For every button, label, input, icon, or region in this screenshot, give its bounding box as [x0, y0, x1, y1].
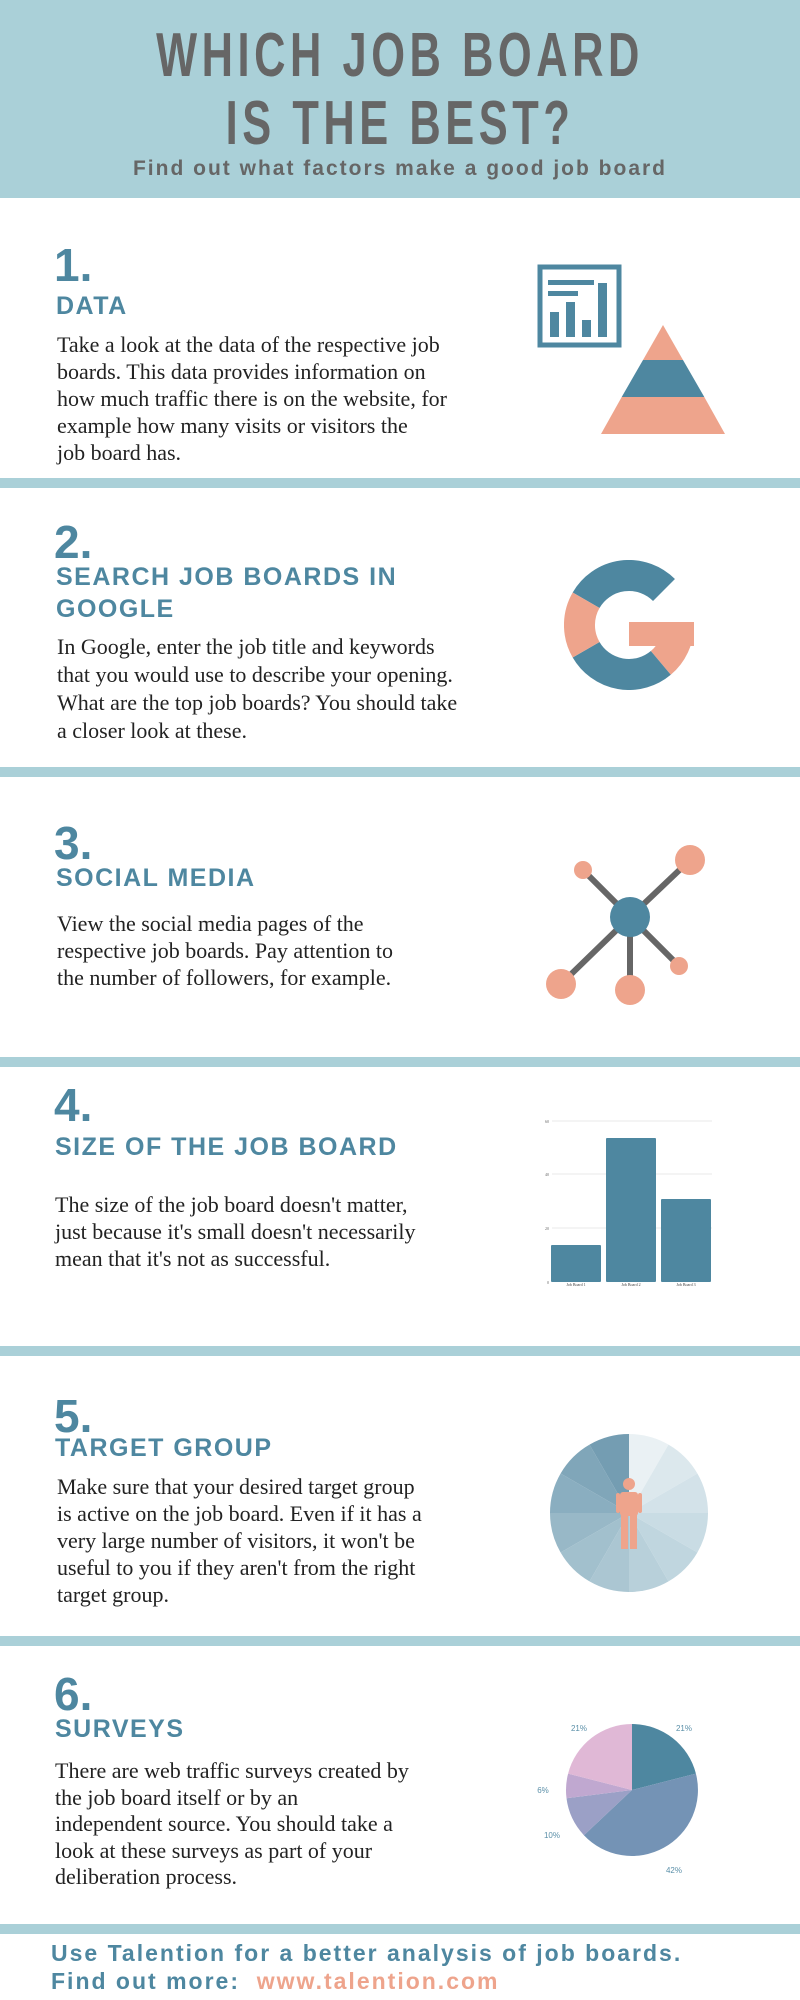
- text social: the number of followers, for example.: [57, 965, 391, 990]
- text size: just because it's small doesn't necessarily: [55, 1219, 415, 1244]
- text size: mean that it's not as successful.: [55, 1246, 330, 1271]
- heading surveys: SURVEYS: [55, 1715, 185, 1743]
- bar chart: 20: [545, 1226, 549, 1231]
- text surveys: There are web traffic surveys created by: [55, 1758, 409, 1783]
- icon: network: [546, 845, 705, 1005]
- icon: target wheel with person: [550, 1434, 708, 1592]
- pie chart: [537, 1724, 698, 1875]
- text google: that you would use to describe your opening.: [57, 662, 453, 687]
- text target: [57, 1474, 422, 1607]
- heading google: SEARCH JOB BOARDS IN: [56, 563, 397, 591]
- number 1: 1.: [54, 239, 92, 291]
- text target: target group.: [57, 1582, 169, 1607]
- text data: [56, 332, 447, 465]
- bar chart: Job Board 2: [621, 1282, 641, 1287]
- footer: [51, 1940, 682, 1994]
- subtitle: Find out what factors make a good job board: [133, 157, 667, 180]
- number 5: 5.: [54, 1390, 92, 1442]
- bar chart: [545, 1119, 712, 1287]
- text size: [54, 1192, 416, 1271]
- text surveys: deliberation process.: [55, 1864, 237, 1889]
- text google: What are the top job boards? You should take: [57, 690, 457, 715]
- heading google: GOOGLE: [56, 595, 175, 623]
- section 2: google: [54, 516, 457, 743]
- text data: Take a look at the data of the respective job: [57, 332, 440, 357]
- heading google: [56, 563, 397, 623]
- icon: chart and pyramid: [538, 264, 725, 434]
- section 3: social media: [54, 817, 393, 990]
- text surveys: independent source. You should take a: [55, 1811, 393, 1836]
- text surveys: [55, 1758, 409, 1889]
- header panel: [0, 0, 800, 198]
- text surveys: the job board itself or by an: [55, 1784, 298, 1810]
- pie chart: 21%: [676, 1724, 692, 1733]
- text google: a closer look at these.: [57, 718, 247, 743]
- footer: Use Talention for a better analysis of job boards.: [51, 1940, 682, 1966]
- text social: respective job boards. Pay attention to: [57, 938, 393, 963]
- heading social: SOCIAL MEDIA: [56, 864, 256, 892]
- bar chart: Job Board 1: [566, 1282, 586, 1287]
- section 1: data: [54, 239, 447, 465]
- heading data: DATA: [56, 292, 128, 320]
- title: IS THE BEST?: [226, 89, 574, 158]
- text size: The size of the job board doesn't matter,: [55, 1192, 408, 1217]
- pie chart: 10%: [544, 1831, 560, 1840]
- text data: boards. This data provides information on: [57, 359, 426, 384]
- section 5: target group: [54, 1390, 422, 1607]
- text data: example how many visits or visitors the: [57, 413, 408, 438]
- heading size: SIZE OF THE JOB BOARD: [55, 1133, 398, 1161]
- text surveys: look at these surveys as part of your: [55, 1838, 372, 1862]
- text data: how much traffic there is on the website, for: [57, 386, 447, 411]
- number 4: 4.: [54, 1079, 92, 1131]
- title: WHICH JOB BOARD: [156, 21, 644, 90]
- text data: job board has.: [57, 440, 181, 465]
- section 6: surveys: [54, 1668, 409, 1889]
- footer: Find out more: www.talention.com: [51, 1968, 499, 1994]
- text google: In Google, enter the job title and keywords: [57, 634, 435, 659]
- pie chart: 21%: [571, 1724, 587, 1733]
- bar chart: 0: [547, 1280, 549, 1285]
- text target: Make sure that your desired target group: [57, 1474, 415, 1499]
- number 3: 3.: [54, 817, 92, 869]
- heading target: TARGET GROUP: [55, 1434, 273, 1462]
- bar chart: 40: [545, 1172, 549, 1177]
- pie chart: 42%: [666, 1866, 682, 1875]
- text social: View the social media pages of the: [57, 911, 364, 936]
- title: [156, 21, 644, 158]
- text social: [57, 911, 393, 990]
- bar chart: Job Board 3: [676, 1282, 696, 1287]
- text google: [57, 634, 457, 743]
- text target: very large number of visitors, it won't be: [57, 1528, 415, 1553]
- pie chart: 6%: [537, 1786, 549, 1795]
- text target: is active on the job board. Even if it has a: [57, 1501, 422, 1526]
- section 4: size: [54, 1079, 416, 1271]
- number 2: 2.: [54, 516, 92, 568]
- text target: useful to you if they aren't from the right: [57, 1555, 415, 1580]
- icon: google G: [564, 560, 694, 690]
- bar chart: 60: [545, 1119, 549, 1124]
- number 6: 6.: [54, 1668, 92, 1720]
